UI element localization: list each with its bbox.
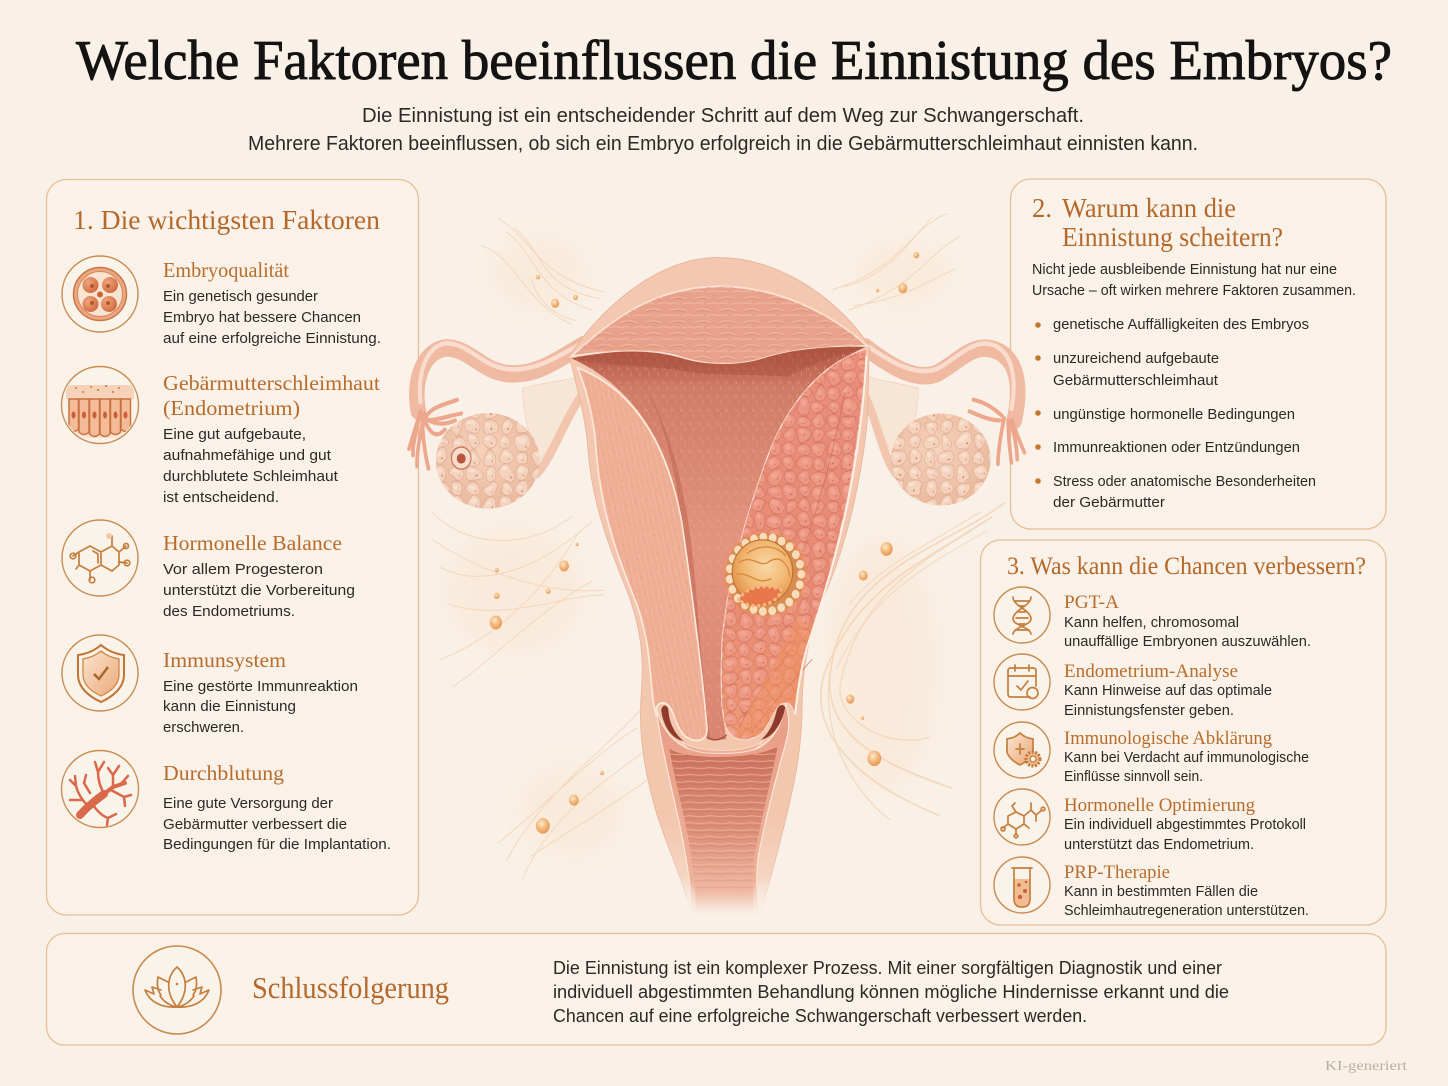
option: PGT-A: Kann helfen, chromosomal	[1064, 615, 1239, 631]
icon: lotus	[133, 946, 221, 1034]
factor: Hormonelle Balance: unterstützt die Vorbereitung	[163, 582, 355, 599]
icon: shield	[62, 635, 138, 711]
icon: shield with gear	[994, 722, 1050, 778]
option: Endometrium-Analyse: Kann Hinweise auf das optimale	[1064, 683, 1272, 699]
fallopian tubes	[409, 342, 1024, 469]
option: PRP-Therapie: Kann in bestimmten Fällen die	[1064, 884, 1258, 900]
option: Endometrium-Analyse: Endometrium-Analyse	[1064, 661, 1238, 682]
title: Welche Faktoren beeinflussen die Einnistung des Embryos?	[76, 30, 1392, 92]
bullet list of causes: unzureichend aufgebaute	[1053, 351, 1219, 367]
option: PGT-A: unauffällige Embryonen auszuwählen.	[1064, 634, 1311, 650]
conclusion text: individuell abgestimmten Behandlung können mögliche Hindernisse erkannt und die	[553, 982, 1229, 1002]
factor: Durchblutung: Gebärmutter verbessert die	[163, 816, 347, 833]
conclusion text	[553, 958, 1229, 1026]
panel 1 heading: 1. Die wichtigsten Faktoren	[73, 205, 380, 235]
factor: Embryoqualität: Embryoqualität	[163, 258, 289, 282]
icon: molecule	[994, 789, 1050, 845]
factor: Embryoqualität: Embryo hat bessere Chancen	[163, 309, 361, 326]
factor: Immunsystem: erschweren.	[163, 719, 244, 736]
panel 2: warum kann die Einnistung scheitern	[1010, 179, 1386, 529]
icon: test tube	[994, 857, 1050, 913]
option: PRP-Therapie: PRP-Therapie	[1064, 862, 1170, 883]
panel 2 heading	[1032, 193, 1283, 252]
factor: Embryoqualität: auf eine erfolgreiche Einnistung.	[163, 330, 381, 347]
factor: Gebärmutterschleimhaut: Eine gut aufgebaute,	[163, 426, 306, 443]
option: Hormonelle Optimierung: Hormonelle Optimierung	[1064, 795, 1255, 816]
factor: Hormonelle Balance: Vor allem Progesteron	[163, 561, 323, 578]
panel 2 heading: 2.	[1032, 193, 1052, 223]
panel: Schlussfolgerung	[46, 934, 1386, 1045]
icon: embryo cells	[62, 256, 138, 332]
background wisps and droplets	[432, 213, 1005, 880]
option: PRP-Therapie: Schleimhautregeneration unterstützen.	[1064, 903, 1309, 919]
option: PGT-A	[994, 587, 1311, 650]
factor: Durchblutung: Bedingungen für die Implantation.	[163, 836, 391, 853]
ovaries	[436, 394, 991, 509]
panel 2 heading: Einnistung scheitern?	[1062, 222, 1283, 252]
uterus outer wall	[569, 257, 869, 916]
left uterine wall section	[578, 368, 707, 740]
factor: Immunsystem: Immunsystem	[163, 648, 286, 672]
option: Endometrium-Analyse	[994, 654, 1272, 719]
panel 3: was kann die Chancen verbessern	[980, 540, 1386, 925]
factor: Immunsystem	[62, 635, 358, 736]
factor: Durchblutung: Eine gute Versorgung der	[163, 795, 333, 812]
icon: blood vessels	[62, 750, 138, 828]
factor: Gebärmutterschleimhaut: ist entscheidend.	[163, 489, 279, 506]
option: Immunologische Abklärung	[994, 722, 1309, 785]
bullet list of causes: ungünstige hormonelle Bedingungen	[1053, 407, 1295, 423]
subtitle	[248, 105, 1198, 155]
option: PRP-Therapie	[994, 857, 1309, 919]
panel 1: die wichtigsten Faktoren	[46, 180, 418, 915]
central illustration: uterus with implanting embryo	[407, 257, 1026, 912]
bullet list of causes	[1035, 317, 1316, 511]
option: Immunologische Abklärung: Kann bei Verdacht auf immunologische	[1064, 750, 1309, 766]
icon: calendar	[994, 654, 1050, 710]
factor: Embryoqualität	[62, 256, 381, 347]
conclusion text: Die Einnistung ist ein komplexer Prozess. Mit einer sorgfältigen Diagnostik und einer	[553, 958, 1222, 978]
uterine cavity	[571, 347, 865, 740]
factor: Durchblutung	[62, 750, 391, 853]
factor: Gebärmutterschleimhaut: aufnahmefähige und gut	[163, 447, 332, 464]
option: Immunologische Abklärung: Einflüsse sinnvoll sein.	[1064, 769, 1203, 785]
option: Immunologische Abklärung: Immunologische Abklärung	[1064, 728, 1272, 749]
panel 3 heading: 3. Was kann die Chancen verbessern?	[1007, 551, 1366, 580]
fundus muscle layer	[571, 286, 867, 364]
option: PGT-A: PGT-A	[1064, 592, 1119, 613]
icon: DNA helix	[994, 587, 1050, 643]
subtitle: Die Einnistung ist ein entscheidender Schritt auf dem Weg zur Schwangerschaft.	[362, 105, 1084, 127]
icon: hormone molecule	[62, 520, 138, 596]
option: Hormonelle Optimierung: unterstützt das Endometrium.	[1064, 837, 1254, 853]
bullet list of causes: der Gebärmutter	[1053, 495, 1165, 511]
option: Endometrium-Analyse: Einnistungsfenster geben.	[1064, 703, 1234, 719]
factor: Hormonelle Balance: Hormonelle Balance	[163, 531, 342, 555]
factor: Gebärmutterschleimhaut: Gebärmutterschleimhaut	[163, 371, 380, 395]
right endometrium layer	[720, 348, 868, 740]
bullet list of causes: Stress oder anatomische Besonderheiten	[1053, 474, 1316, 490]
icon: endometrium cells	[62, 366, 138, 444]
panel 2 intro text: Nicht jede ausbleibende Einnistung hat nur eine	[1032, 262, 1337, 278]
cervix and vaginal canal	[656, 704, 789, 916]
factor: Durchblutung: Durchblutung	[163, 761, 284, 785]
bullet list of causes: Gebärmutterschleimhaut	[1053, 373, 1218, 389]
factor: Immunsystem: Eine gestörte Immunreaktion	[163, 678, 358, 695]
conclusion text: Chancen auf eine erfolgreiche Schwangerschaft verbessert werden.	[553, 1006, 1087, 1026]
panel 2 intro text	[1032, 262, 1356, 299]
panel 2 heading: Warum kann die	[1062, 193, 1236, 223]
factor: Gebärmutterschleimhaut: durchblutete Schleimhaut	[163, 468, 339, 485]
factor: Hormonelle Balance: des Endometriums.	[163, 603, 295, 620]
bullet list of causes: genetische Auffälligkeiten des Embryos	[1053, 317, 1309, 333]
factor: Gebärmutterschleimhaut	[62, 366, 380, 506]
bullet list of causes: Immunreaktionen oder Entzündungen	[1053, 440, 1300, 456]
factor: Embryoqualität: Ein genetisch gesunder	[163, 288, 318, 305]
subtitle: Mehrere Faktoren beeinflussen, ob sich ein Embryo erfolgreich in die Gebärmutterschleimhaut einnisten kann.	[248, 133, 1198, 155]
option: Hormonelle Optimierung: Ein individuell abgestimmtes Protokoll	[1064, 817, 1306, 833]
factor: Gebärmutterschleimhaut: (Endometrium)	[163, 396, 300, 420]
factor: Hormonelle Balance	[62, 520, 355, 620]
broad ligament webs	[522, 377, 918, 462]
panel 2 intro text: Ursache – oft wirken mehrere Faktoren zusammen.	[1032, 283, 1356, 299]
conclusion heading: Schlussfolgerung	[252, 970, 449, 1005]
factor: Immunsystem: kann die Einnistung	[163, 698, 296, 715]
KI watermark: KI-generiert	[1325, 1059, 1407, 1074]
option: Hormonelle Optimierung	[994, 789, 1306, 853]
implanting embryo	[722, 530, 808, 619]
